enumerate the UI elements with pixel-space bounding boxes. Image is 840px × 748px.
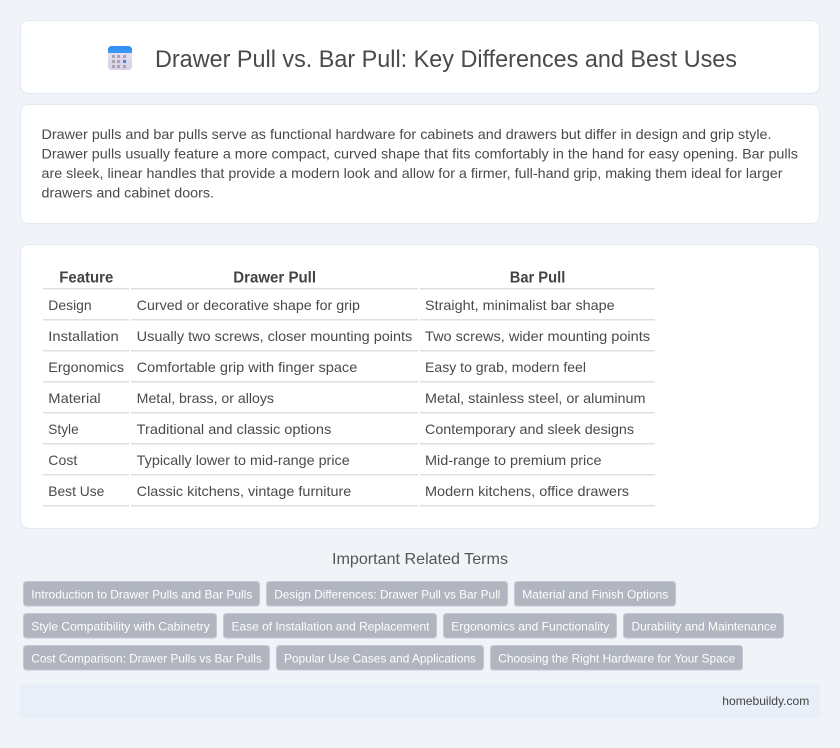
intro text: Drawer pulls and bar pulls serve as functional hardware for cabinets and drawers but differ in design and grip style. (42, 126, 772, 142)
row: design: Design (48, 297, 92, 313)
row: best use: Best Use (48, 483, 104, 499)
row: style: Style (48, 421, 79, 437)
row: material: Metal, stainless steel, or aluminum (425, 390, 646, 406)
tag (224, 614, 436, 638)
tag: Style Compatibility with Cabinetry (31, 619, 210, 633)
table header: Bar Pull (510, 270, 565, 287)
row: best use (48, 483, 629, 499)
icon: calendar (108, 46, 132, 70)
footer (20, 684, 820, 718)
row: cost: Typically lower to mid-range price (137, 452, 350, 468)
tag (24, 614, 216, 638)
tag: Cost Comparison: Drawer Pulls vs Bar Pulls (31, 651, 262, 665)
row: installation (48, 328, 650, 344)
table header (59, 270, 565, 287)
row: ergonomics (48, 359, 586, 375)
row: installation: Installation (48, 328, 119, 344)
row: ergonomics: Easy to grab, modern feel (425, 359, 586, 375)
tag: Material and Finish Options (522, 587, 668, 601)
related term tags (24, 582, 784, 670)
row: design: Straight, minimalist bar shape (425, 297, 615, 313)
tag (24, 582, 260, 606)
tag (490, 646, 742, 670)
table header: Feature (59, 270, 113, 287)
title: Drawer Pull vs. Bar Pull: Key Differences and Best Uses (155, 46, 737, 73)
intro text: Drawer pulls usually feature a more compact, curved shape that fits comfortably in the hand for easy opening. Bar pulls (42, 146, 798, 162)
tag (514, 582, 676, 606)
tag (24, 646, 270, 670)
tag: Ergonomics and Functionality (451, 619, 609, 633)
tag (266, 582, 508, 606)
panel: comparison table (20, 244, 820, 528)
row: installation: Usually two screws, closer mounting points (137, 328, 412, 344)
row: best use: Modern kitchens, office drawers (425, 483, 629, 499)
row: style: Contemporary and sleek designs (425, 421, 634, 437)
row: cost: Cost (48, 452, 77, 468)
tag: Popular Use Cases and Applications (284, 651, 476, 665)
panel: header (20, 20, 820, 94)
tag: Design Differences: Drawer Pull vs Bar Pull (274, 587, 500, 601)
tag (444, 614, 616, 638)
tag (624, 614, 784, 638)
row: material (48, 390, 646, 406)
row: cost: Mid-range to premium price (425, 452, 602, 468)
row: best use: Classic kitchens, vintage furniture (137, 483, 352, 499)
footer source text: homebuildy.com (722, 694, 809, 708)
row: style (48, 421, 634, 437)
row: style: Traditional and classic options (137, 421, 331, 437)
row: installation: Two screws, wider mounting points (425, 328, 650, 344)
tag: Durability and Maintenance (632, 619, 777, 633)
heading: related terms: Important Related Terms (332, 551, 508, 568)
tag: Choosing the Right Hardware for Your Space (498, 651, 736, 665)
tag (276, 646, 484, 670)
panel: introduction (20, 104, 820, 224)
tag: Ease of Installation and Replacement (232, 619, 430, 633)
table header: Drawer Pull (233, 270, 316, 287)
row: material: Metal, brass, or alloys (137, 390, 274, 406)
intro text: are sleek, linear handles that provide a modern look and allow for a firmer, full-hand grip, making them ideal for larger (42, 165, 783, 181)
row: cost (48, 452, 602, 468)
tag: Introduction to Drawer Pulls and Bar Pulls (31, 587, 252, 601)
intro text: drawers and cabinet doors. (42, 184, 214, 200)
row: design: Curved or decorative shape for grip (137, 297, 360, 313)
row: material: Material (48, 390, 101, 406)
intro text (42, 126, 798, 200)
row: ergonomics: Ergonomics (48, 359, 124, 375)
row: design (48, 297, 615, 313)
row: ergonomics: Comfortable grip with finger space (137, 359, 358, 375)
